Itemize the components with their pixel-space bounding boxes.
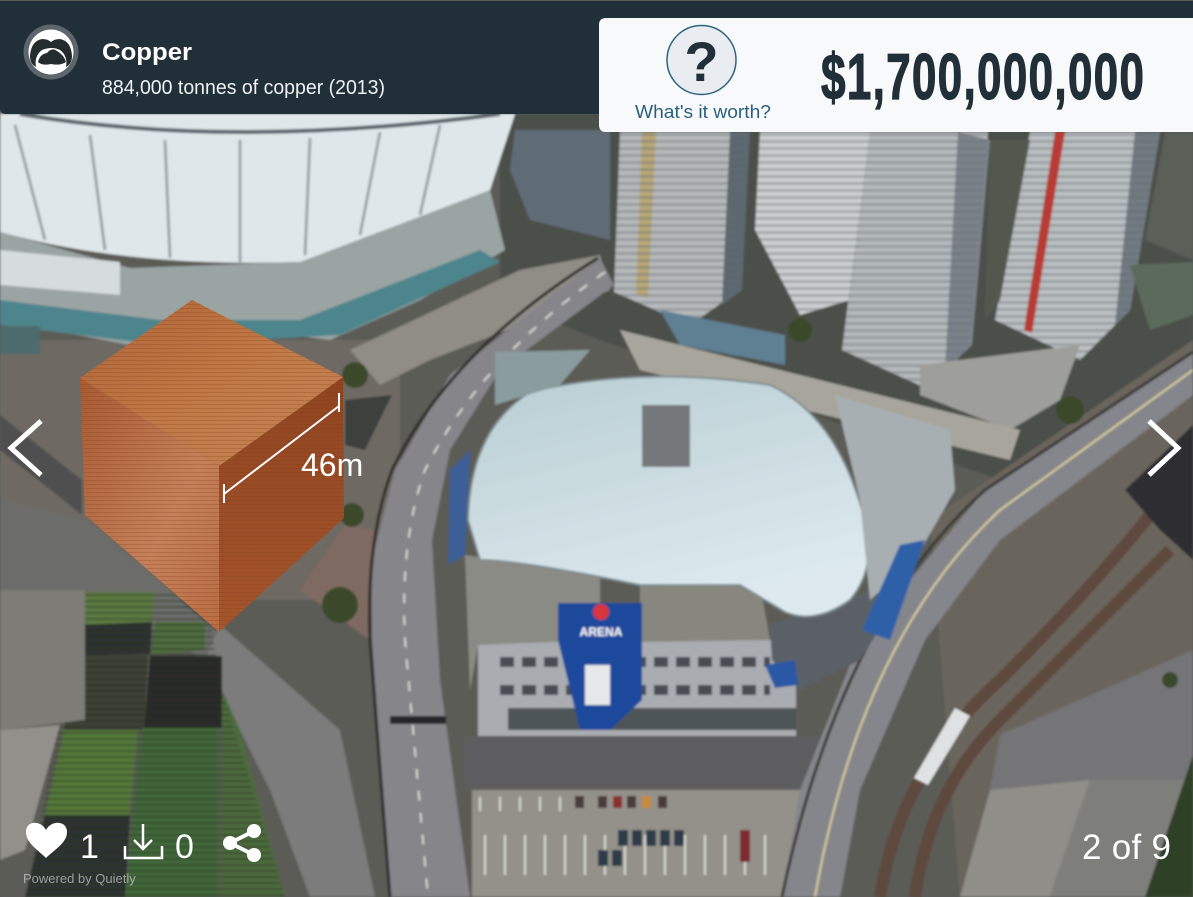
lower-right lots [960,425,1193,897]
value panel [599,18,1193,132]
question icon [667,26,736,94]
download icon [125,824,162,858]
stadium [0,114,610,385]
page counter: 2 of 9 [1082,828,1171,867]
top header bar [0,1,1193,114]
subtitle: 884,000 tonnes of copper (2013) [102,77,385,99]
cube dimension label: 46m [301,447,363,483]
left highway [369,258,614,897]
powered by: Powered by Quietly [23,871,136,886]
cube dimension line [224,393,339,503]
heart icon [26,823,67,858]
right arrow [1149,421,1178,475]
towers [614,132,1193,460]
trees near cube [322,318,1178,688]
dollar value: $1,700,000,000 [821,41,1144,113]
downloads count: 0 [175,828,194,866]
title: Copper [102,39,192,66]
rail tracks [880,515,1170,897]
ground and roads left of cube [0,395,392,660]
parking lot [472,790,802,897]
question icon: ? [684,30,719,93]
horizontal road [465,737,825,790]
arena [448,350,955,736]
road junction left [205,625,375,897]
what's it worth label: What's it worth? [635,102,771,122]
likes count: 1 [80,828,99,866]
cube left face [80,378,219,632]
copper cube [80,300,363,632]
left arrow [11,421,41,475]
cube right face [219,377,344,632]
logo icon [24,24,78,80]
social bar [23,823,259,886]
cube top face [80,300,343,466]
right highway [782,352,1193,897]
cube wood-grain texture [80,300,344,632]
arena: ARENA [580,625,623,639]
farm plots [0,590,285,897]
share icon [225,826,259,860]
